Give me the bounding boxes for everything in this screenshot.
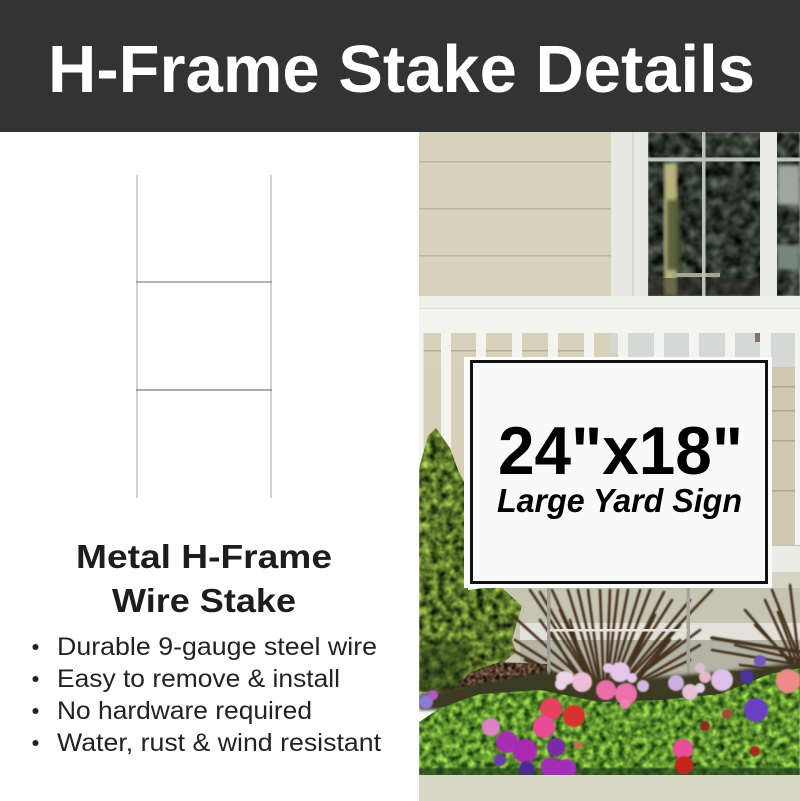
yard sign [464,357,772,588]
feature list: Durable 9-gauge steel wire [57,633,377,661]
icon: metal H-frame wire stake [136,175,272,498]
title banner: H-Frame Stake Details [48,32,755,107]
spiky ornamental grass [512,585,800,695]
stake heading: Metal H-Frame [76,538,332,575]
house siding [419,132,800,367]
feature list: Easy to remove & install [57,665,340,693]
feature list: No hardware required [57,697,312,725]
yard sign: Large Yard Sign [497,482,742,519]
porch base behind plants [500,545,800,695]
stake heading [76,538,332,619]
shrub [419,428,522,695]
mulch [454,662,554,690]
sign stakes [547,588,690,676]
yard sign: 24"x18" [498,413,743,489]
feature list [32,633,381,757]
flower bed foliage [419,662,800,776]
petunia flowers [419,655,800,779]
porch railing [419,296,800,557]
feature list: Water, rust & wind resistant [57,729,381,757]
stake heading: Wire Stake [112,582,296,619]
panel: yard photo [419,132,800,801]
sidewalk [419,775,800,801]
window [611,132,800,296]
title banner [0,0,800,132]
